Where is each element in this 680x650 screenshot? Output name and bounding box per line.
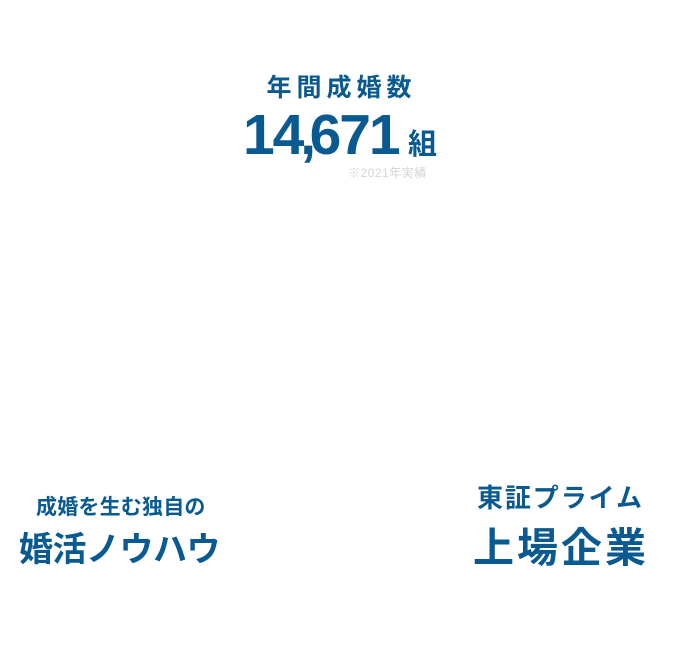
subheading: unique know-how: 成婚を生む独自の	[36, 496, 206, 519]
heading: marriage-hunting know-how: 婚活ノウハウ	[19, 531, 220, 569]
number: 14,671 couples: 14,671 組	[243, 103, 437, 167]
heading: annual marriages: 年間成婚数	[266, 74, 417, 102]
heading: listed company: 上場企業	[473, 525, 649, 571]
feature: listed company	[473, 483, 649, 571]
footnote: 2021 results: ※2021年実績	[348, 166, 427, 180]
stat block: annual marriages	[243, 74, 437, 180]
feature: know-how	[19, 496, 220, 569]
subheading: TSE Prime: 東証プライム	[477, 483, 644, 513]
